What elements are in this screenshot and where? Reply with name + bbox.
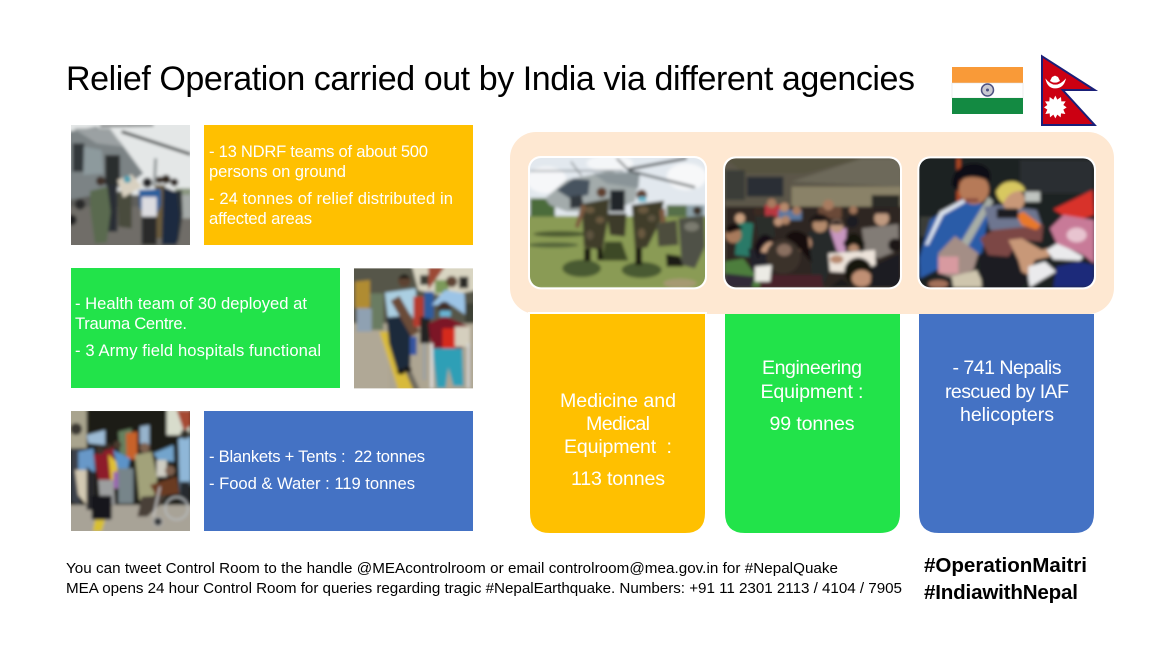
strip [528,312,707,314]
card: medicine: Medical [586,413,650,435]
panel: health text: Trauma Centre. [75,314,187,333]
card: engineering: Equipment : [760,381,864,403]
panel: bottom cards [530,314,1094,533]
card: engineering: 99 tonnes [770,413,855,435]
photo: patient in wheelchair [354,268,473,388]
card: rescued: helicopters [960,404,1054,426]
panel: NDRF [66,122,473,248]
panel: health text: - Health team of 30 deployed at [75,294,307,313]
footer: contact text [66,560,902,597]
footer: contact text: You can tweet Control Room to the handle @MEAcontrolroom or email controlroom@mea.gov.in for #NepalQuake [66,560,838,577]
panel: NDRF text: persons on ground [209,162,346,181]
photo: helicopter evacuation [71,125,190,245]
card: rescued: - 741 Nepalis [952,357,1062,379]
card: rescued [919,314,1094,533]
card: rescued: rescued by IAF [945,381,1069,403]
panel: health [71,263,478,393]
photo: boarding aircraft [71,411,190,531]
panel: relief supplies text: - Blankets + Tents : 22 tonnes [209,447,425,466]
panel: health text: - 3 Army field hospitals functional [75,341,321,360]
card: engineering: Engineering [762,357,862,379]
card: medicine: Equipment : [564,436,672,458]
panel: health text [71,268,340,388]
panel: NDRF text: affected areas [209,209,312,228]
panel: relief supplies text [204,411,473,531]
footer: hashtags: #IndiawithNepal [924,581,1078,604]
icon: Nepal flag [1042,56,1095,125]
panel: photo band [510,132,1114,314]
card: engineering [725,314,900,533]
photo: evacuees in aircraft [722,155,905,292]
photo: soldiers and helicopter [527,153,710,289]
icon: India flag [952,67,1023,114]
panel: NDRF text: - 24 tonnes of relief distributed in [209,189,453,208]
footer: hashtags: #OperationMaitri [924,554,1087,577]
panel: NDRF text: - 13 NDRF teams of about 500 [209,142,428,161]
photo: man with child [917,155,1097,292]
card: medicine: Medicine and [560,390,676,412]
panel: NDRF text [204,125,473,245]
footer: hashtags [924,554,1087,604]
footer: contact text: MEA opens 24 hour Control Room for queries regarding tragic #NepalEarthquake. Numbers: +91 11 2301 2113 / 4104 / 7905 [66,580,902,597]
card: medicine [530,314,705,533]
card: medicine: 113 tonnes [571,468,665,490]
title: Relief Operation carried out by India via different agencies [66,60,915,98]
panel: relief supplies text: - Food & Water : 119 tonnes [209,474,415,493]
panel: relief supplies [67,408,473,535]
